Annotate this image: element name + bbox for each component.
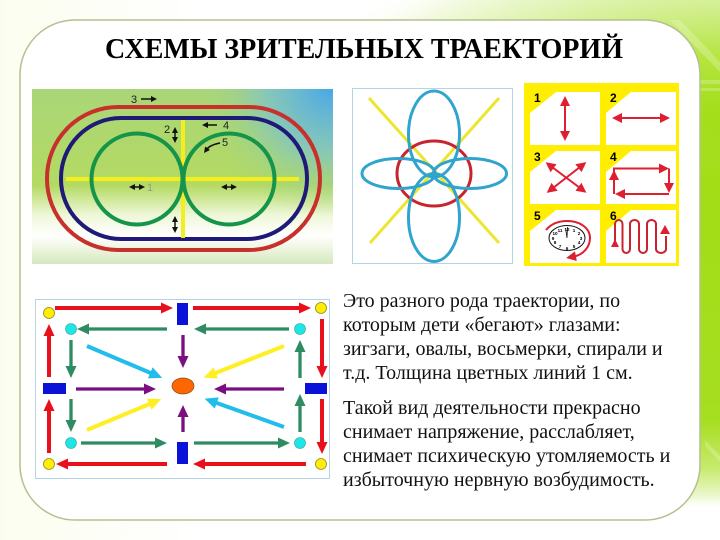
green arrows bbox=[71, 329, 300, 443]
text block: description: Это разного рода траектории, по bbox=[343, 290, 620, 312]
card numbers: 1 bbox=[534, 91, 541, 105]
diagram: petals and diagonal lines bbox=[352, 88, 512, 264]
clock: 3 bbox=[580, 236, 583, 241]
clock: 6 bbox=[566, 246, 569, 251]
card numbers: 2 bbox=[610, 91, 617, 105]
red arrows bbox=[49, 308, 322, 464]
diagram: oval tracks with figure eight: 3 bbox=[131, 94, 137, 106]
small arrows and numbers bbox=[134, 99, 232, 228]
text block: benefits: Такой вид деятельности прекрасно bbox=[343, 397, 641, 419]
text block: description: т.д. Толщина цветных линий 1 см. bbox=[343, 362, 633, 384]
card arrows bbox=[546, 104, 669, 256]
card numbers: 5 bbox=[534, 209, 541, 223]
text block: benefits: снимает психическую утомляемость и bbox=[343, 445, 671, 467]
diagram: oval tracks with figure eight: 5 bbox=[222, 137, 228, 149]
text block: benefits: избыточную нервную возбудимость. bbox=[343, 469, 655, 491]
blue petals bbox=[362, 91, 506, 262]
purple arrows bbox=[76, 335, 284, 432]
text block: description: зигзаги, овалы, восьмерки, спирали и bbox=[343, 338, 663, 360]
cyan dots bbox=[66, 324, 306, 448]
card numbers: 4 bbox=[610, 150, 617, 164]
diagram: six exercise cards bbox=[524, 83, 679, 266]
card numbers bbox=[534, 91, 617, 223]
clock: 10 bbox=[552, 231, 558, 236]
orange centre ellipse bbox=[172, 378, 194, 394]
serpentine arrowheads bbox=[611, 225, 670, 247]
yellow cross lines bbox=[66, 120, 299, 238]
clock: 4 bbox=[578, 240, 581, 245]
diagram: oval tracks with figure eight: 4 bbox=[223, 120, 229, 132]
title: СХЕМЫ ЗРИТЕЛЬНЫХ ТРАЕКТОРИЙ bbox=[105, 34, 623, 65]
text block: benefits bbox=[343, 397, 671, 491]
yellow diagonals bbox=[369, 98, 499, 243]
clock: 9 bbox=[552, 236, 555, 241]
yellow dots bbox=[44, 302, 326, 470]
clock: 7 bbox=[559, 244, 562, 249]
cyan arrows bbox=[87, 346, 284, 427]
diagram: oval tracks with figure eight: 2 bbox=[164, 124, 170, 136]
blue rectangles bbox=[43, 303, 327, 464]
clock: 2 bbox=[578, 231, 581, 236]
clock bbox=[549, 226, 585, 251]
clock: 5 bbox=[573, 244, 576, 249]
clock: 1 bbox=[573, 228, 576, 233]
red circle bbox=[397, 141, 471, 206]
yellow arrows bbox=[87, 346, 284, 430]
card cells bbox=[530, 92, 676, 263]
diagram: oval tracks with figure eight: 1 bbox=[147, 182, 153, 194]
navy inner oval bbox=[61, 118, 307, 239]
green figure eight circles bbox=[92, 134, 274, 224]
card numbers: 6 bbox=[610, 209, 617, 223]
clock: 8 bbox=[554, 240, 557, 245]
diagram: oval tracks with figure eight bbox=[32, 89, 333, 264]
text block: description bbox=[343, 290, 663, 384]
clock: 11 bbox=[558, 228, 563, 233]
clock: 12 bbox=[564, 227, 570, 232]
text block: description: которым дети «бегают» глазами: bbox=[343, 314, 621, 336]
diagram: eye movement arrows bbox=[36, 300, 330, 478]
card numbers: 3 bbox=[534, 150, 541, 164]
red outer oval bbox=[47, 107, 320, 250]
text block: benefits: снимает напряжение, расслабляет, bbox=[343, 421, 635, 443]
